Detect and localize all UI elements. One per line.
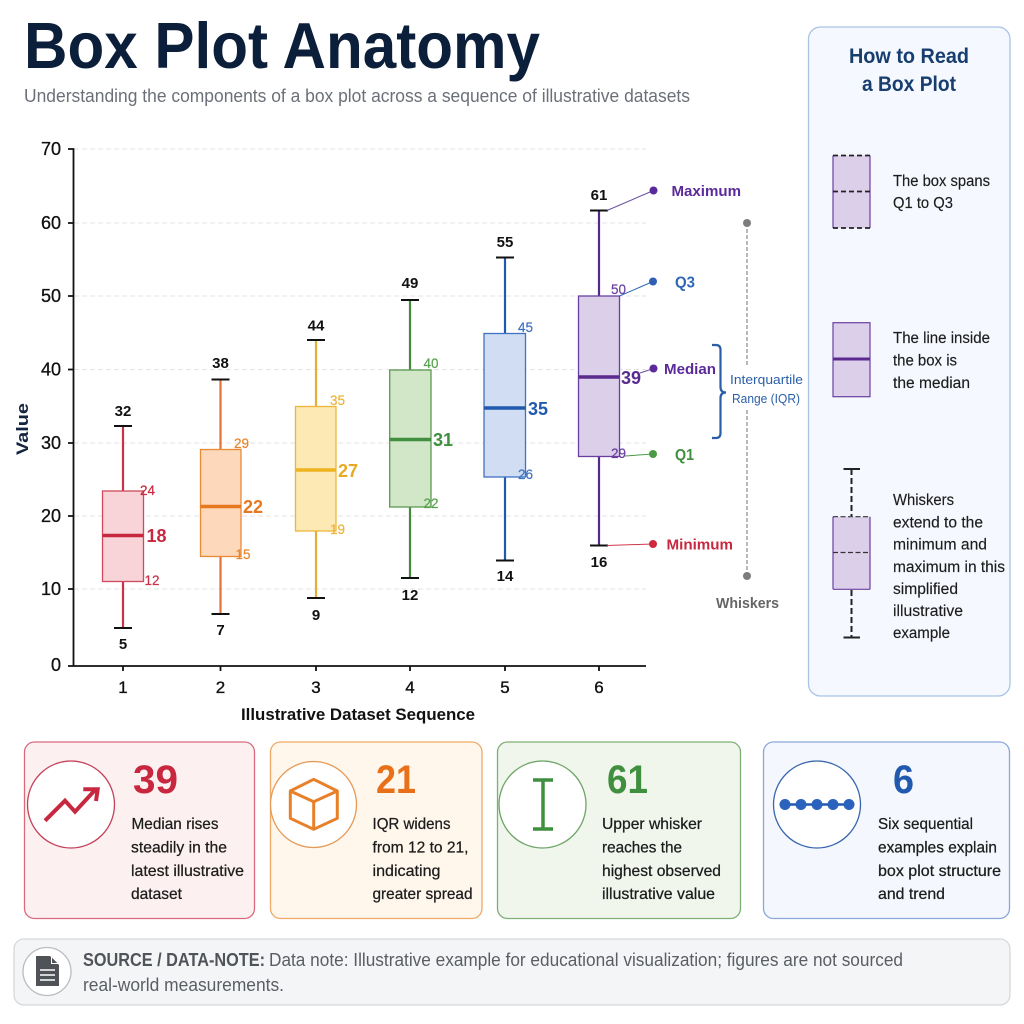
box 3: 35 [330,393,345,408]
card text: steadily in the [131,840,227,856]
card text: and trend [878,886,945,903]
annotation: maximum: Maximum [672,183,741,200]
box 6 [578,187,641,571]
x axis labels: 6 [594,678,604,697]
card text: latest illustrative [131,863,244,880]
x axis labels: 1 [118,678,128,697]
panel heading [849,45,969,96]
box 2: 22 [243,497,263,517]
annotation: Q1 [625,447,694,464]
box 5: 26 [518,467,533,482]
box 2: 15 [236,547,251,562]
card text: reaches the [602,840,682,856]
card text [372,816,472,903]
legend text: whiskers: extend to the [893,514,983,532]
box 2: 29 [234,436,249,451]
icon: whisker [499,761,586,848]
legend text: box spans: The box spans [893,173,990,190]
x axis labels: 3 [311,678,321,697]
note text: SOURCE / DATA-NOTE: [83,950,265,970]
card text: Median rises [132,816,218,833]
source note [14,939,1010,1005]
box 1: 32 [115,403,131,420]
x axis labels [118,678,604,697]
box 5: 14 [497,568,514,585]
annotation: IQR bracket [712,345,803,438]
card: IQR 21 [270,742,482,918]
legend icon: box spans [833,156,870,228]
icon: document [23,948,71,996]
card text: Upper whisker [602,816,703,833]
icon: cube [270,762,356,848]
box 2: 7 [216,622,225,639]
card text: indicating [372,863,440,880]
box 1: 12 [144,573,160,588]
annotation: median: Median [664,361,716,378]
card text: box plot structure [878,863,1001,880]
legend text: whiskers [893,492,1005,642]
card text: highest observed [602,863,721,880]
card text: IQR widens [372,816,450,833]
legend text: whiskers: simplified [893,581,958,598]
box plot chart [13,139,646,724]
box 5 [484,234,548,585]
card: six datasets [764,742,1010,918]
card: six datasets: 6 [893,758,914,802]
y axis labels: 70 [41,139,61,159]
box 5: 55 [497,234,513,251]
box 6: 16 [591,554,607,571]
box 6: 29 [611,446,626,461]
annotation: IQR bracket: Range (IQR) [732,392,800,406]
annotation: IQR bracket: Interquartile [730,373,803,387]
y axis labels: 20 [41,506,61,526]
legend text: whiskers: minimum and [893,536,987,554]
y axis labels: 0 [51,655,61,675]
panel heading: a Box Plot [862,73,956,96]
box 6: 50 [611,282,626,297]
x axis labels: 5 [500,678,510,697]
legend text: median: the median [893,375,970,392]
card text [878,816,1001,903]
annotation: whiskers range [716,219,779,612]
card text: greater spread [372,886,472,903]
y axis title: Value [13,403,32,455]
annotation: minimum: Minimum [666,536,733,554]
legend text: box spans [893,173,990,212]
box 4: 12 [402,587,418,604]
legend text: median [893,330,990,392]
panel heading: How to Read [849,45,969,68]
y axis labels: 30 [41,433,61,453]
annotation: Q3 [620,274,695,296]
card: IQR 21: 21 [376,758,416,802]
axes [68,149,646,671]
subtitle: Understanding the components of a box plot across a sequence of illustrative datasets [24,86,690,106]
note text: Data note: Illustrative example for educational visualization; figures are not sourced [269,950,903,970]
box 4: 40 [424,356,439,371]
title: Box Plot Anatomy [24,9,540,82]
box 3: 9 [312,607,320,624]
card text: examples explain [878,840,997,856]
box 6: 39 [621,368,641,388]
card: upper whisker 61 [498,742,740,918]
legend icon: whiskers [833,469,870,638]
card text: from 12 to 21, [372,840,468,856]
box 1 [102,403,167,653]
note text: real-world measurements. [83,975,284,995]
x axis labels: 4 [405,678,415,697]
icon: trend arrow [28,761,114,848]
legend text: whiskers: example [893,625,950,642]
box 3: 19 [330,522,345,537]
annotation: maximum [607,183,741,210]
box 1: 18 [146,526,167,546]
gridlines [74,149,646,589]
panel: how to read [808,27,1010,696]
annotation: whiskers range: Whiskers [716,595,779,612]
box 6: 61 [591,187,607,204]
legend text: median: The line inside [893,330,990,347]
x axis title: Illustrative Dataset Sequence [241,705,475,724]
annotation: Q3: Q3 [675,274,695,292]
icon: sequence dots [774,761,860,848]
y axis labels [41,139,61,675]
y axis labels: 50 [41,286,61,306]
card text: Six sequential [878,816,973,833]
card text: dataset [131,886,183,903]
box 1: 5 [119,636,127,653]
card: upper whisker 61: 61 [607,758,648,802]
card text [131,816,244,903]
legend text: whiskers: illustrative [893,603,963,620]
legend text: whiskers: maximum in this [893,559,1005,576]
box 2: 38 [212,355,229,372]
card text [602,816,721,903]
x axis labels: 2 [216,678,225,697]
box 4: 49 [402,275,418,292]
card: median 39: 39 [133,758,178,802]
y axis labels: 40 [41,360,61,380]
legend text: median: the box is [893,352,957,370]
annotation: minimum [607,536,733,554]
card text: illustrative value [602,886,715,903]
box 4: 31 [433,430,453,450]
box 4: 22 [424,496,439,511]
box 1: 24 [140,483,156,498]
box 2 [200,355,263,639]
note text [83,950,903,995]
legend text: whiskers: Whiskers [893,492,954,509]
annotation: Q1: Q1 [675,447,694,464]
legend icon: median [833,323,870,397]
y axis labels: 60 [41,213,61,233]
box 5: 35 [528,399,548,419]
y axis labels: 10 [41,579,61,599]
box 3: 27 [338,461,358,481]
legend text: box spans: Q1 to Q3 [893,195,953,212]
box 5: 45 [518,320,533,335]
box 3: 44 [308,318,325,334]
card: median 39 [24,742,254,918]
box 3 [296,318,358,624]
box 4 [390,275,453,604]
annotation: median [640,361,716,378]
